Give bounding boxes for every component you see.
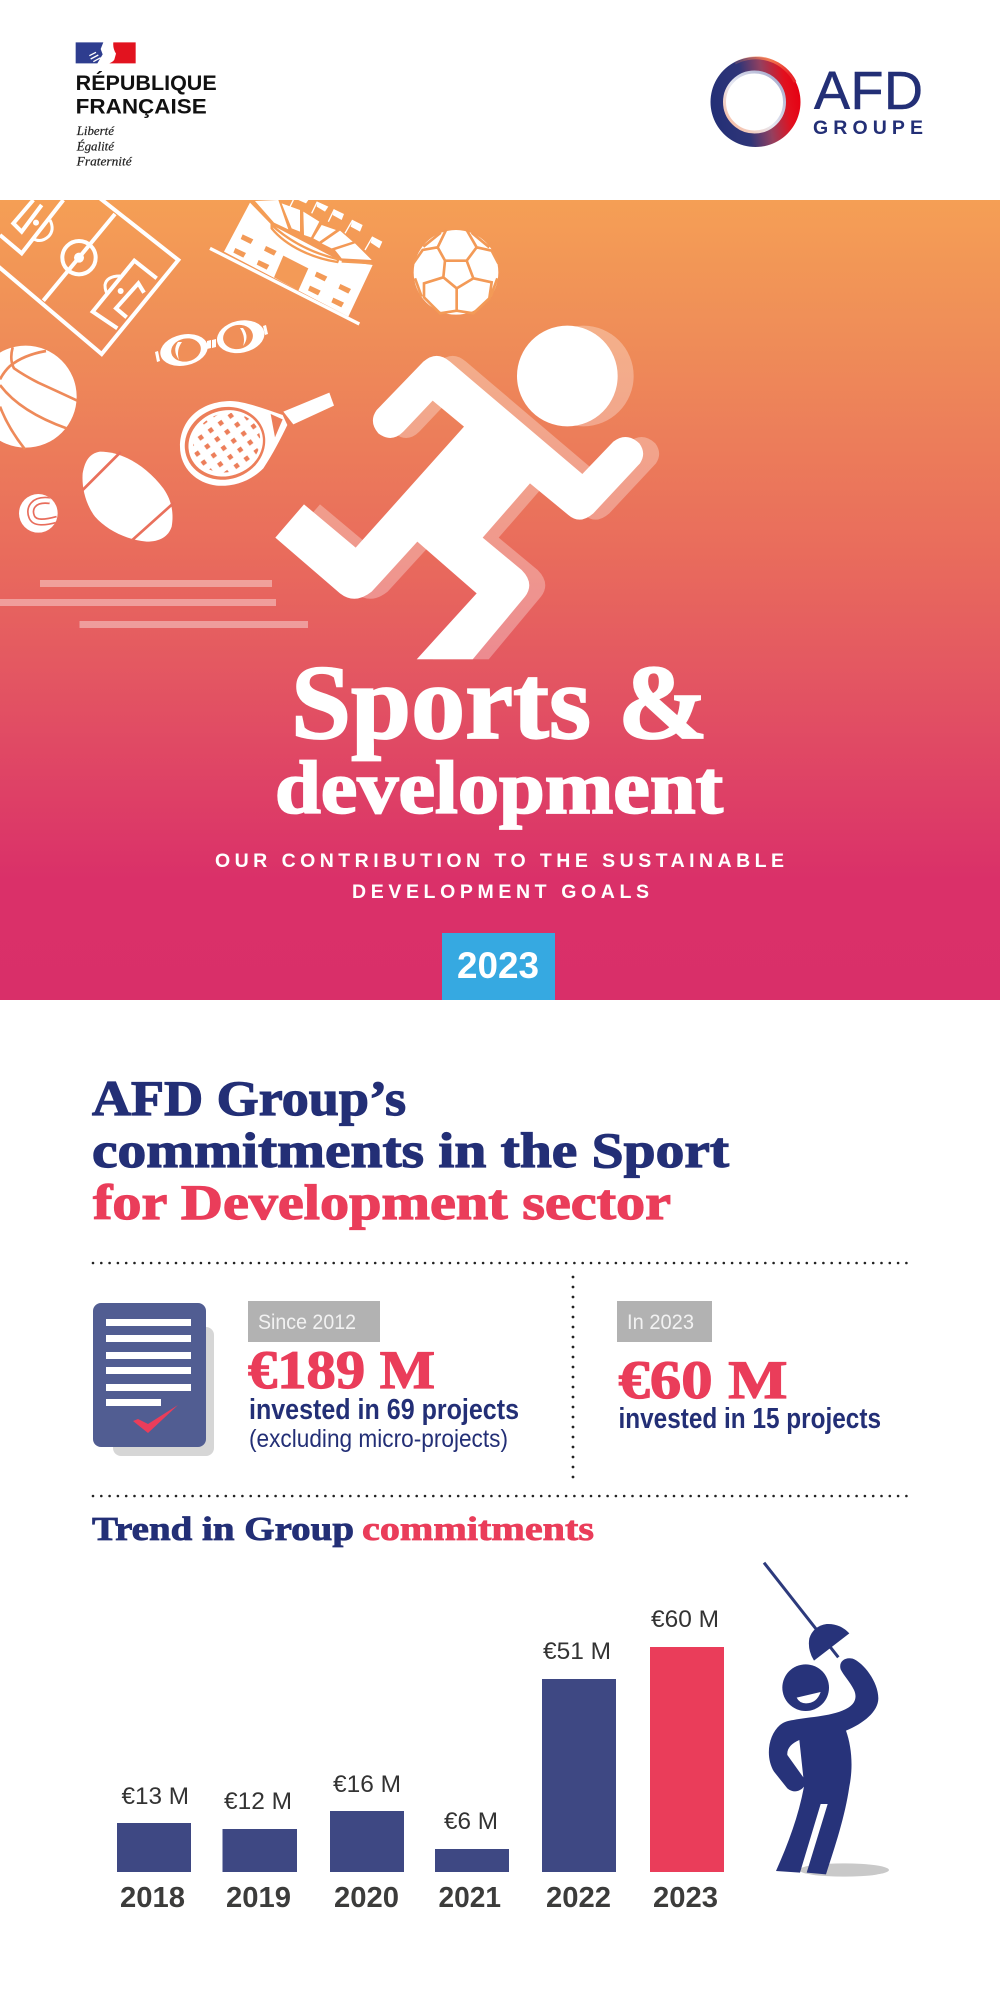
text: motto: Liberté <box>76 123 115 138</box>
panel: in 2023 <box>617 1301 881 1435</box>
icon: fencer figure <box>764 1563 889 1877</box>
year labels <box>120 1882 718 1914</box>
icon: running figure <box>275 326 659 659</box>
icon: basketball <box>0 346 77 449</box>
year labels: 2018 <box>120 1882 185 1914</box>
subtitle <box>215 850 784 903</box>
text: invested in 15 projects: invested in 15 projects <box>618 1403 881 1435</box>
runner figure <box>275 326 643 659</box>
heading: AFD Group's commitments <box>92 1070 729 1230</box>
value labels: €6 M <box>444 1808 498 1835</box>
heading: trend in group commitments: Trend in Group <box>92 1511 354 1548</box>
text: motto <box>76 123 133 169</box>
icon: soccer ball <box>413 230 498 315</box>
value labels: €12 M <box>224 1788 292 1815</box>
year labels: 2023 <box>653 1882 718 1914</box>
text: GROUPE: GROUPE <box>813 117 923 139</box>
stat: €189 M: €189 M <box>248 1340 435 1400</box>
bars <box>117 1647 724 1872</box>
text: République Française <box>76 72 217 118</box>
heading: trend in group commitments <box>92 1511 594 1548</box>
tag: since 2012: Since 2012 <box>258 1311 356 1334</box>
icon: AFD ring <box>711 57 801 147</box>
text: AFD: AFD <box>814 61 923 121</box>
title: Sports & development <box>275 644 723 830</box>
value labels: €51 M <box>543 1638 611 1665</box>
icon: document with check mark <box>93 1303 214 1456</box>
subtitle: DEVELOPMENT GOALS <box>352 881 649 903</box>
runner shadow <box>291 326 659 659</box>
year labels: 2020 <box>334 1882 399 1914</box>
hero gradient background <box>0 200 1000 1000</box>
icon: tennis ball <box>19 494 58 533</box>
text: République Française: FRANÇAISE <box>76 95 207 118</box>
value labels: €13 M <box>122 1783 189 1810</box>
text: invested in 69 projects: invested in 69 projects <box>249 1394 519 1426</box>
stat: €60 M: €60 M <box>618 1350 788 1410</box>
subtitle: OUR CONTRIBUTION TO THE SUSTAINABLE <box>215 850 784 872</box>
panel: since 2012 <box>93 1301 519 1456</box>
icon: padel racket <box>175 393 334 490</box>
year badge <box>442 933 555 1000</box>
text: motto: Fraternité <box>76 154 133 169</box>
text: excluding micro-projects: (excluding micro-projects) <box>249 1425 508 1453</box>
logo: AFD Groupe <box>711 57 923 147</box>
heading: AFD Group's commitments: AFD Group’s <box>92 1070 406 1126</box>
value labels <box>122 1606 719 1835</box>
logo: République Française <box>76 42 217 169</box>
bar chart: commitments by year <box>117 1606 724 1914</box>
icon: speed lines <box>0 580 308 628</box>
icons: sports equipment <box>0 198 498 542</box>
year labels: 2019 <box>226 1882 291 1914</box>
panel: hero banner <box>0 198 1000 1000</box>
tag: since 2012 <box>248 1301 380 1342</box>
title: Sports & development: development <box>275 747 723 830</box>
text: motto: Égalité <box>76 139 115 154</box>
heading: trend in group commitments: commitments <box>362 1511 594 1548</box>
icon: stadium <box>210 200 382 324</box>
year labels: 2022 <box>546 1882 611 1914</box>
icon: rugby ball <box>82 452 174 542</box>
value labels: €16 M <box>333 1771 401 1798</box>
text: République Française: RÉPUBLIQUE <box>76 72 217 95</box>
icon: French flag with Marianne <box>76 42 136 63</box>
title: Sports & development: Sports & <box>291 644 708 761</box>
heading: AFD Group's commitments: commitments in the Sport <box>92 1122 729 1178</box>
icon: soccer pitch <box>0 198 178 354</box>
tag: in 2023: In 2023 <box>627 1311 694 1334</box>
year labels: 2021 <box>438 1882 501 1914</box>
heading: AFD Group's commitments: for Development sector <box>93 1174 671 1230</box>
icon: swimming goggles <box>155 320 268 366</box>
year badge: 2023 <box>457 945 539 986</box>
value labels: €60 M <box>651 1606 719 1633</box>
tag: in 2023 <box>617 1301 712 1342</box>
panel: page header <box>76 42 923 169</box>
